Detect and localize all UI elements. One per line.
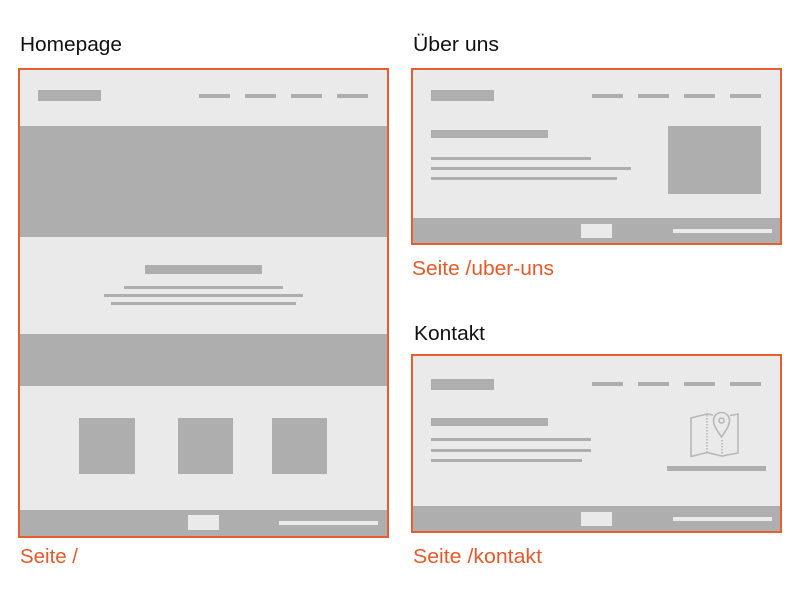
centered text block (104, 265, 303, 305)
navigation items (199, 94, 368, 98)
caption: Seite /uber-uns: Seite /uber-uns (412, 258, 554, 280)
text block (431, 418, 591, 462)
heading: Kontakt: Kontakt (414, 323, 485, 345)
panel: Homepage wireframe (19, 69, 388, 537)
image placeholder (668, 126, 761, 194)
caption: Seite /kontakt: Seite /kontakt (413, 546, 542, 568)
caption: Seite /: Seite / (20, 546, 78, 568)
hero banner (20, 126, 387, 237)
footer (413, 218, 780, 243)
text block (431, 130, 631, 180)
footer (20, 510, 387, 536)
navigation items (592, 382, 761, 386)
three image tiles (79, 418, 327, 474)
logo placeholder (431, 379, 494, 390)
heading: Über uns: Über uns (413, 34, 499, 56)
map caption line (667, 466, 766, 471)
panel: Über uns wireframe (412, 69, 781, 244)
navigation items (592, 94, 761, 98)
footer (413, 506, 780, 531)
icon: map with pin (691, 412, 738, 456)
middle band (20, 334, 387, 386)
panel: Kontakt wireframe (412, 355, 781, 532)
logo placeholder (431, 90, 494, 101)
logo placeholder (38, 90, 101, 101)
heading: Homepage: Homepage (20, 34, 122, 56)
